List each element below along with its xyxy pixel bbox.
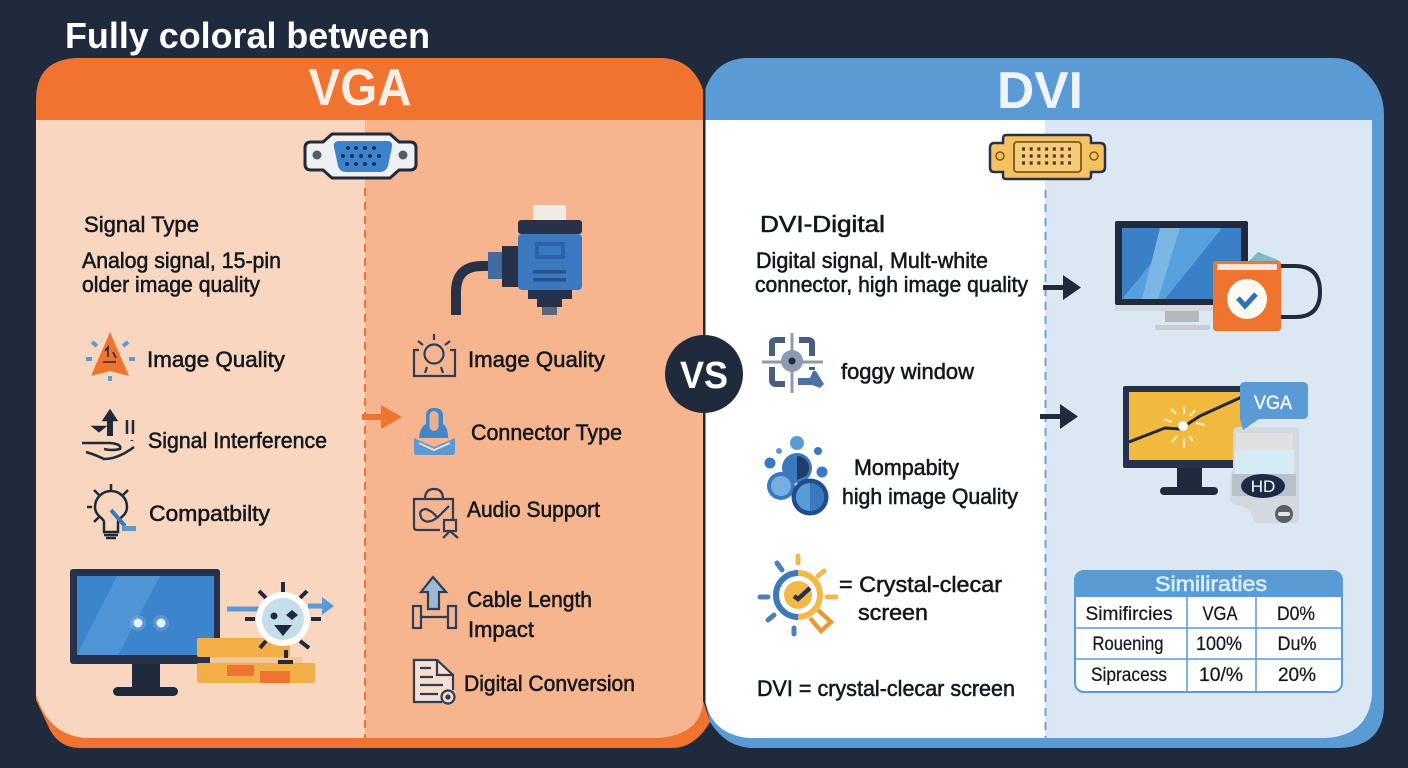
illustration: yellow monitor with VGA badge: HD <box>1251 477 1275 496</box>
table: similarities: Du% <box>1278 634 1317 655</box>
icon: audio support bag <box>414 489 458 538</box>
icon: connector type <box>414 408 455 455</box>
label: cable length impact: Impact <box>468 617 534 642</box>
label: image quality: Image Quality <box>147 347 285 372</box>
label: cable length impact: Cable Length <box>467 587 592 612</box>
icon: digital conversion document <box>414 660 454 704</box>
label: connector type: Connector Type <box>471 420 622 445</box>
text block: DVI-Digital: Digital signal, Mult-white <box>756 248 988 273</box>
panel: DVI <box>705 58 1384 748</box>
label: audio support: Audio Support <box>467 497 600 522</box>
table: similarities: VGA <box>1202 604 1238 625</box>
text block: signal type: Signal Type <box>84 212 199 237</box>
text block: DVI-Digital: connector, high image quality <box>755 272 1028 297</box>
table: similarities: Sipracess <box>1091 665 1167 686</box>
illustration: yellow monitor with VGA badge: VGA <box>1254 393 1292 414</box>
text block: signal type: Analog signal, 15-pin <box>82 248 281 273</box>
text block: crystal-clear screen: = Crystal-clecar <box>839 572 1002 597</box>
icon: cable length <box>413 577 456 628</box>
heading: VGA: VGA <box>308 59 412 117</box>
text block: compatibility and quality: Mompabity <box>854 455 959 480</box>
icon: warning triangle <box>86 332 135 381</box>
table: similarities <box>1075 571 1342 692</box>
text block: signal type <box>82 212 281 297</box>
table: similarities: 10/% <box>1199 665 1243 686</box>
label: foggy window: foggy window <box>841 359 974 384</box>
text block: compatibility and quality: high image Quality <box>842 484 1018 509</box>
badge: VS <box>665 335 743 413</box>
text block: DVI-Digital: DVI-Digital <box>760 211 885 237</box>
arrow: to monitor <box>1043 275 1081 300</box>
icon: image quality sun <box>414 334 455 376</box>
label: cable length impact <box>467 587 592 642</box>
heading: DVI: DVI <box>997 62 1083 120</box>
illustration: yellow monitor with VGA badge <box>1123 382 1308 523</box>
arrow: to yellow monitor <box>1040 404 1078 429</box>
label: compatibility: Compatbilty <box>149 501 270 526</box>
table: similarities: Similiraties <box>1155 573 1267 596</box>
arrow: orange <box>362 405 402 429</box>
icon: foggy window <box>762 333 824 393</box>
label: digital conversion: Digital Conversion <box>464 671 635 696</box>
icon: blue circles <box>764 436 828 516</box>
table: similarities: Simifircies <box>1086 604 1172 625</box>
label: image quality right: Image Quality <box>468 347 605 372</box>
text block: crystal-clear screen: screen <box>858 600 928 625</box>
text block: compatibility and quality <box>842 455 1018 509</box>
icon: VGA plug with cable <box>456 205 582 315</box>
text block: crystal-clear screen <box>839 572 1002 625</box>
title: Fully coloral between <box>65 15 430 56</box>
badge: VS: VS <box>680 355 728 397</box>
table: similarities: 100% <box>1196 634 1242 655</box>
table: similarities: D0% <box>1277 604 1315 625</box>
text block: signal type: older image quality <box>82 272 260 297</box>
table: similarities: Rouening <box>1092 634 1164 655</box>
panel: VGA <box>36 58 710 748</box>
text block: DVI-Digital <box>755 211 1028 297</box>
illustration: monitor with check mug <box>1115 221 1320 331</box>
icon: crystal-clear magnifier <box>760 556 836 634</box>
label: DVI summary: DVI = crystal-clecar screen <box>757 676 1015 701</box>
icon: DVI connector <box>990 135 1105 179</box>
illustration: monitor with smiling sun <box>70 569 334 696</box>
icon: signal interference hand <box>82 411 134 459</box>
divider between panels <box>703 90 706 702</box>
table: similarities: 20% <box>1278 665 1316 686</box>
label: signal interference: Signal Interference <box>148 428 327 453</box>
icon: VGA connector <box>305 134 416 178</box>
icon: light bulb <box>87 484 136 538</box>
